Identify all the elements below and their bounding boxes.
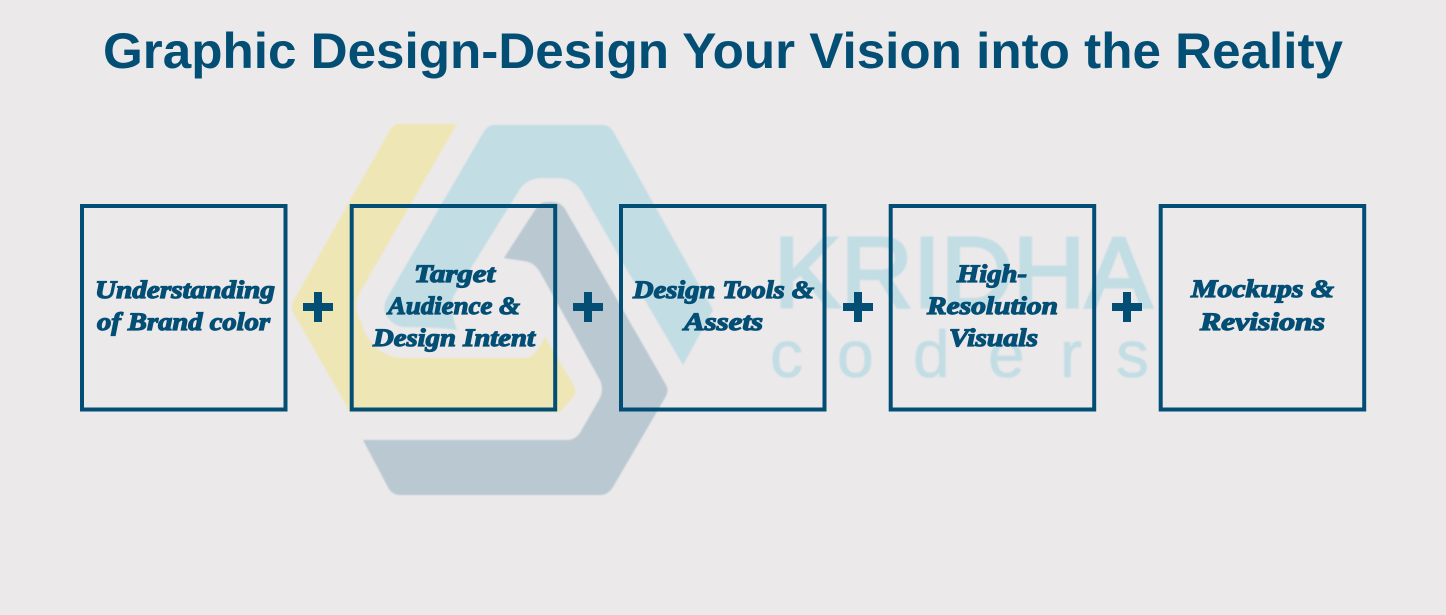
box 4: high-resolution visuals xyxy=(891,206,1094,410)
box 5: mockups and revisions: Mockups & xyxy=(1190,276,1335,303)
box 4: high-resolution visuals: Resolution xyxy=(926,293,1058,320)
box 3: design tools: Design Tools & xyxy=(632,277,815,304)
plus 4 xyxy=(1112,292,1142,322)
logo wordmark: coders: coders xyxy=(770,317,1149,391)
box 2: target audience: Target xyxy=(414,261,496,288)
plus 3 xyxy=(843,292,873,322)
box 5: mockups and revisions xyxy=(1161,206,1364,410)
logo: blue segment xyxy=(384,125,713,365)
watermark logo xyxy=(292,124,1152,495)
plus 1 xyxy=(303,292,333,322)
logo: grey segment xyxy=(363,202,668,495)
box 3: design tools xyxy=(621,206,824,410)
logo wordmark: KRIDHA: KRIDHA xyxy=(774,217,1152,329)
box 3: design tools: Assets xyxy=(682,309,763,336)
box 4: high-resolution visuals: High- xyxy=(956,261,1027,288)
box 5: mockups and revisions: Revisions xyxy=(1199,309,1325,336)
box 2: target audience: Audience & xyxy=(386,293,521,320)
logo: yellow segment xyxy=(292,124,576,412)
box 1: brand color: of Brand color xyxy=(97,309,270,336)
box 1: brand color xyxy=(82,206,286,410)
title: Graphic Design-Design Your Vision into the Reality xyxy=(103,23,1343,79)
box 2: target audience: Design Intent xyxy=(372,325,536,352)
box 4: high-resolution visuals: Visuals xyxy=(949,325,1038,352)
plus 2 xyxy=(573,292,603,322)
box 2: target audience xyxy=(352,206,555,410)
box 1: brand color: Understanding xyxy=(95,277,275,304)
